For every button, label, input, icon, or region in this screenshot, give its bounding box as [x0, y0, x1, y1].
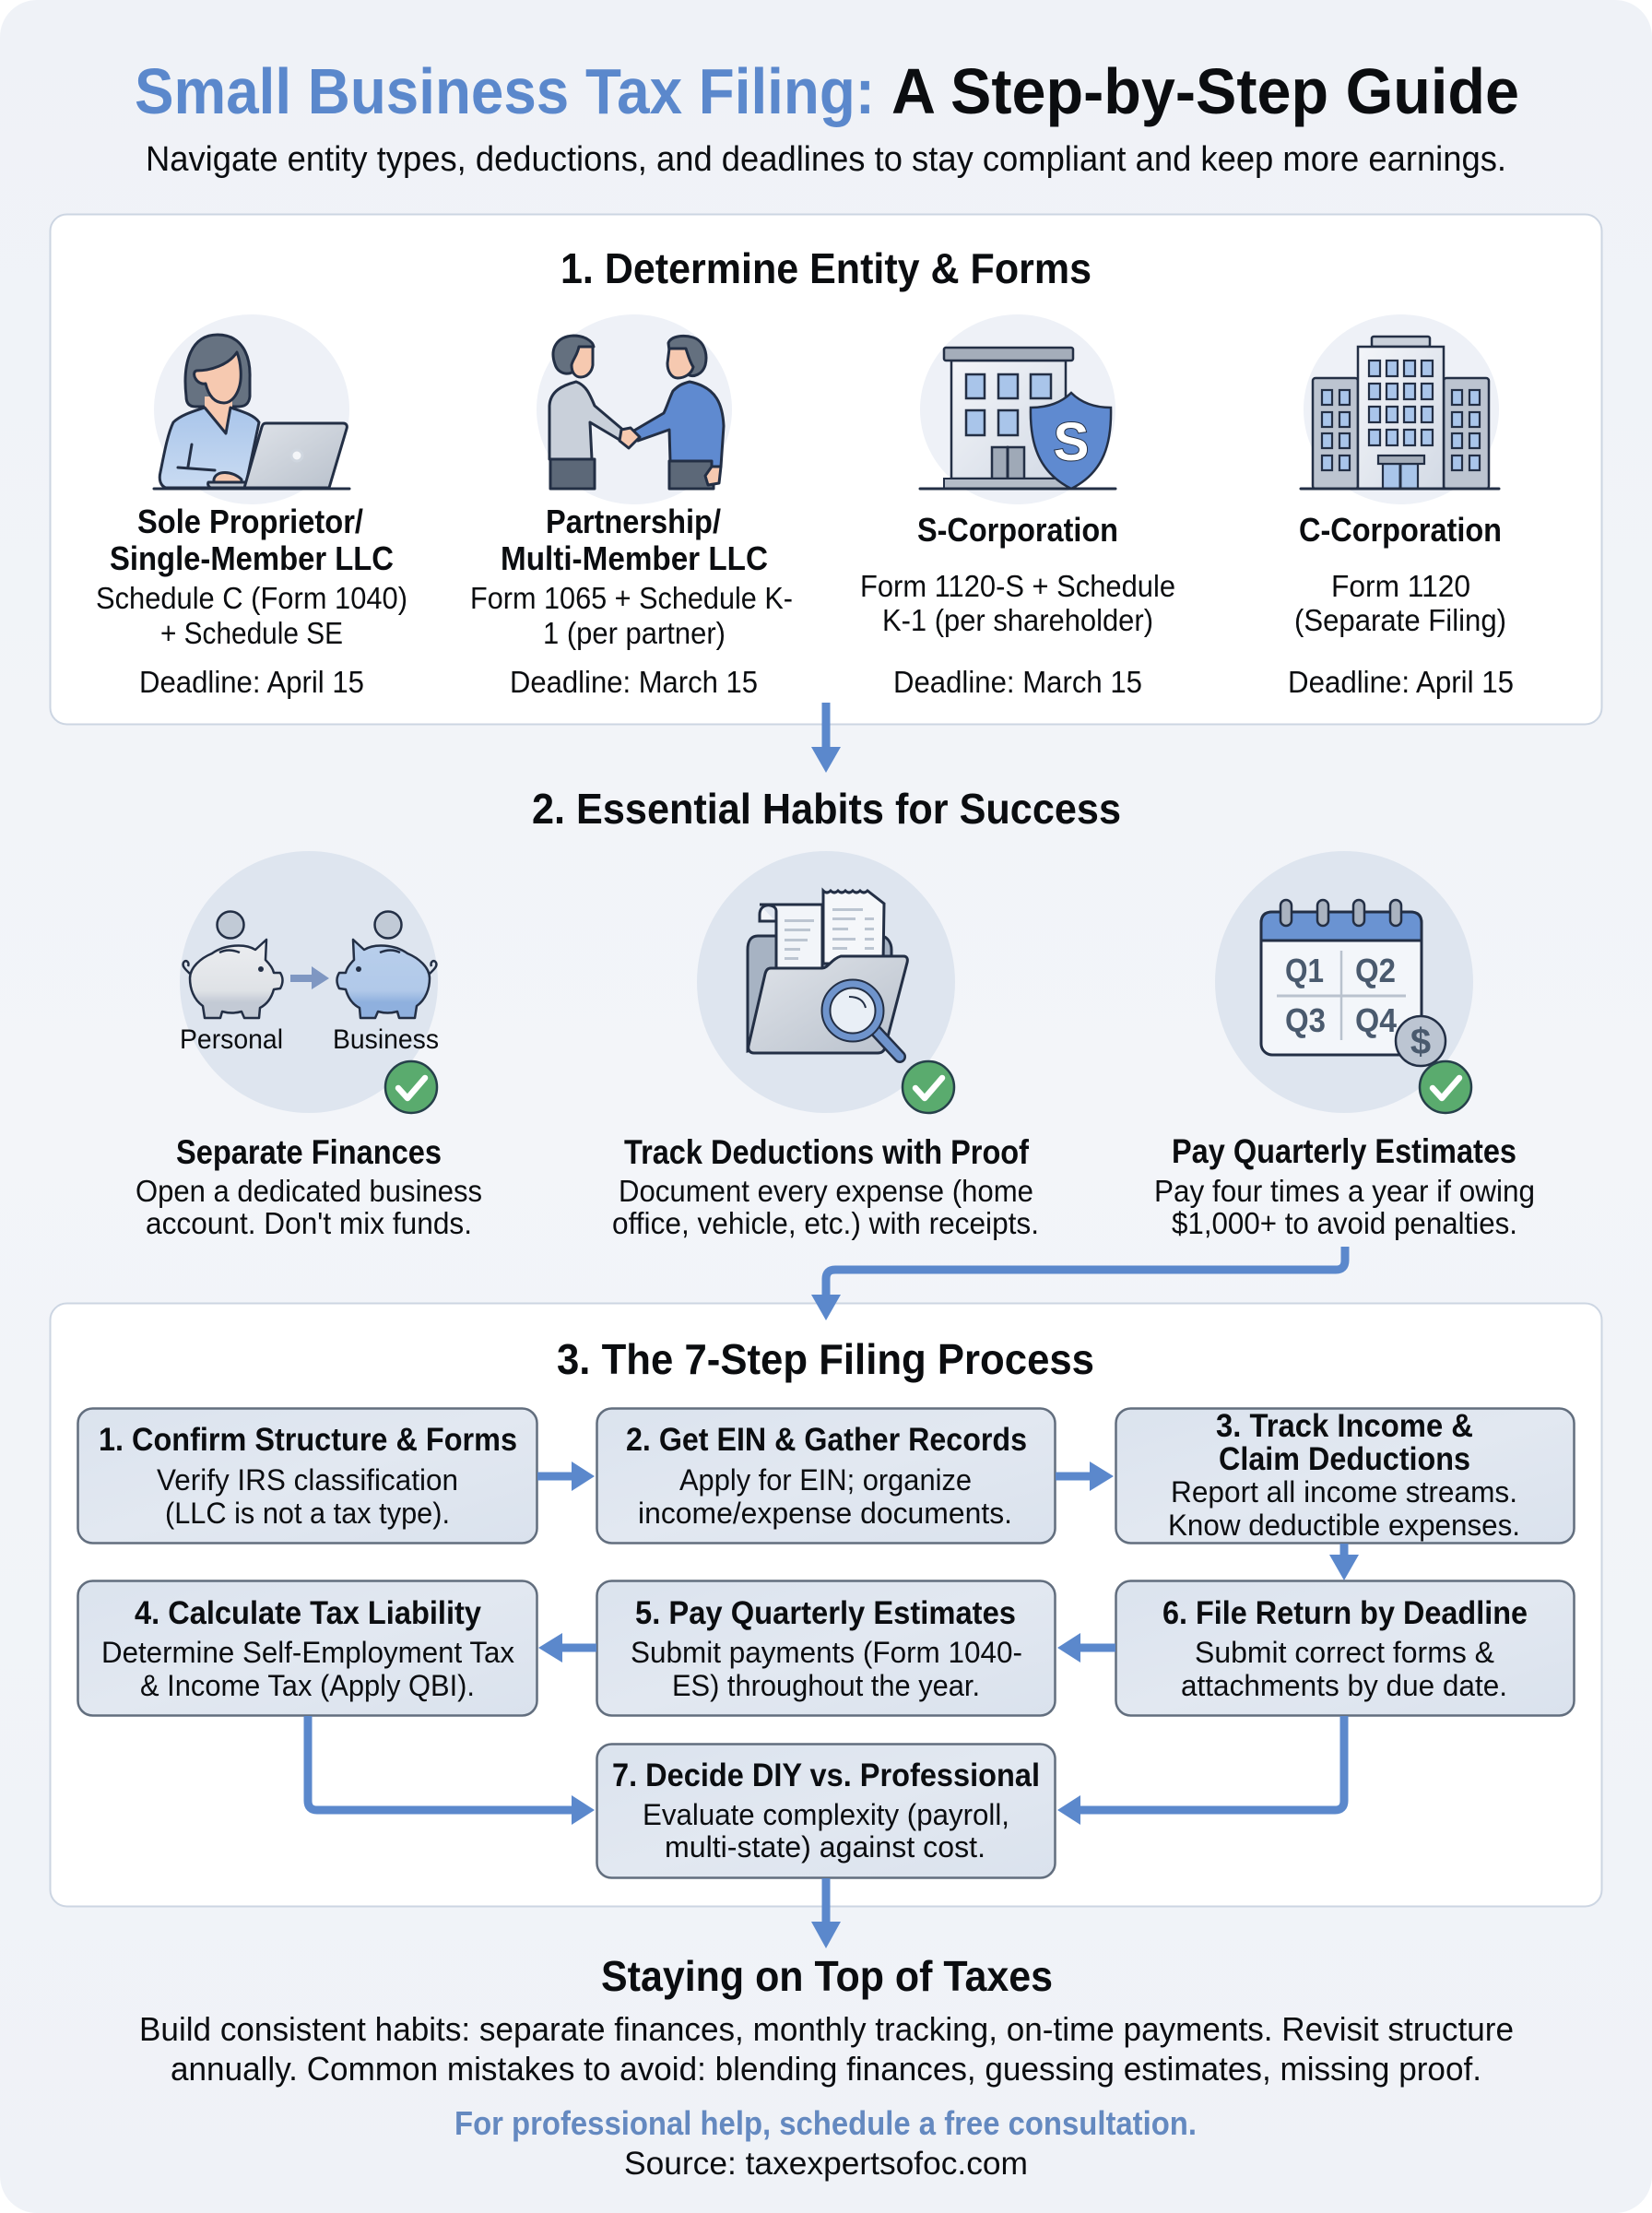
text: summary: Build consistent habits: separate finances, monthly tracking, on-time payments. Revisit structure	[139, 2010, 1514, 2048]
text: partnership: Partnership/	[546, 503, 721, 540]
heading: section 1: 1. Determine Entity & Forms	[560, 244, 1092, 292]
text: c-corporation: (Separate Filing)	[1294, 603, 1506, 637]
arrow: filing process to summary	[811, 1878, 841, 1948]
step 4	[77, 1580, 537, 1715]
text: s-corporation: Form 1120-S + Schedule	[860, 569, 1175, 603]
title: Small Business Tax Filing:	[135, 55, 875, 127]
text: s-corporation	[860, 511, 1175, 699]
text: summary	[139, 2010, 1514, 2088]
step 3: 3. Track Income &	[1216, 1408, 1473, 1444]
text: partnership: Deadline: March 15	[510, 665, 758, 699]
panel: separate finances	[136, 851, 482, 1240]
step 3: Report all income streams.	[1171, 1475, 1517, 1509]
step 1: Verify IRS classification	[157, 1463, 458, 1497]
step 5	[597, 1580, 1055, 1715]
icon: quarterly calendar with coin: $	[1410, 1022, 1431, 1062]
text: s-corporation: Deadline: March 15	[893, 665, 1142, 699]
arrow: step 2 to step 3	[1056, 1462, 1114, 1491]
text: separate finances: Open a dedicated business	[136, 1174, 482, 1208]
heading: staying on top of taxes: Staying on Top of Taxes	[601, 1952, 1053, 2000]
text: sole proprietor	[96, 503, 407, 699]
title	[135, 55, 1519, 127]
step 4: Determine Self-Employment Tax	[101, 1636, 514, 1669]
text: sole proprietor: Deadline: April 15	[139, 665, 364, 699]
text: s-corporation: K-1 (per shareholder)	[882, 603, 1153, 637]
text: pay quarterly estimates	[1154, 1132, 1535, 1240]
text: partnership: Multi-Member LLC	[501, 539, 768, 577]
step 3: Claim Deductions	[1219, 1441, 1470, 1477]
text: pay quarterly estimates: Pay Quarterly Estimates	[1172, 1132, 1516, 1170]
text: c-corporation: C-Corporation	[1299, 511, 1502, 549]
text: separate finances: account. Don't mix funds.	[146, 1206, 472, 1240]
icon: sole proprietor at laptop	[154, 314, 349, 504]
text: partnership	[470, 503, 793, 699]
arrow: step 3 to step 6	[1329, 1544, 1359, 1580]
title: A Step-by-Step Guide	[891, 55, 1519, 127]
icon: quarterly calendar with coin: Q4	[1355, 1001, 1397, 1039]
step 7: Evaluate complexity (payroll,	[643, 1798, 1009, 1831]
text: separate finances: Separate Finances	[176, 1133, 442, 1171]
text: sole proprietor: + Schedule SE	[160, 616, 343, 650]
icon: piggy banks personal to business: Personal	[180, 1024, 283, 1055]
step 2: Apply for EIN; organize	[679, 1463, 972, 1497]
text: c-corporation: Deadline: April 15	[1288, 665, 1514, 699]
source: Source: taxexpertsofoc.com	[624, 2146, 1028, 2182]
text: s-corporation: S-Corporation	[917, 511, 1118, 549]
heading: section 3: 3. The 7-Step Filing Process	[557, 1335, 1094, 1383]
step 1	[77, 1409, 537, 1544]
panel: track deductions	[612, 851, 1039, 1240]
icon: piggy banks personal to business: Business	[333, 1024, 439, 1055]
step 4: 4. Calculate Tax Liability	[135, 1595, 481, 1631]
step 1: 1. Confirm Structure & Forms	[99, 1422, 517, 1458]
panel: 7-step filing process	[50, 1304, 1602, 1907]
step 6: Submit correct forms &	[1195, 1636, 1494, 1669]
step 5: 5. Pay Quarterly Estimates	[635, 1595, 1016, 1631]
panel: pay quarterly estimates	[1154, 851, 1535, 1240]
arrow: step 4 to step 7	[308, 1716, 595, 1825]
heading: section 2: 2. Essential Habits for Success	[532, 785, 1121, 833]
arrow: step 1 to step 2	[537, 1462, 595, 1491]
text: sole proprietor: Schedule C (Form 1040)	[96, 581, 407, 615]
step 6: 6. File Return by Deadline	[1162, 1595, 1528, 1631]
arrow: step 5 to step 4	[538, 1633, 596, 1663]
text: track deductions: Track Deductions with Proof	[624, 1133, 1030, 1171]
step 6	[1115, 1580, 1575, 1715]
step 7: 7. Decide DIY vs. Professional	[612, 1757, 1040, 1793]
icon: s-corporation building with shield: S	[1054, 412, 1089, 472]
step 3	[1115, 1408, 1575, 1544]
text: pay quarterly estimates: Pay four times a year if owing	[1154, 1174, 1535, 1208]
icon: quarterly calendar with coin	[1215, 851, 1473, 1113]
panel: determine entity and forms	[50, 214, 1602, 725]
icon: piggy banks personal to business	[180, 851, 439, 1113]
step 6: attachments by due date.	[1181, 1669, 1507, 1702]
icon: s-corporation building with shield	[920, 314, 1115, 504]
text: summary: annually. Common mistakes to avoid: blending finances, guessing estimates, missing proof.	[171, 2050, 1481, 2088]
step 2: 2. Get EIN & Gather Records	[626, 1422, 1027, 1458]
icon: quarterly calendar with coin: Q2	[1355, 952, 1396, 989]
step 7: multi-state) against cost.	[665, 1830, 985, 1864]
text: track deductions: Document every expense (home	[619, 1174, 1033, 1208]
text: sole proprietor: Sole Proprietor/	[137, 503, 363, 540]
step 1: (LLC is not a tax type).	[165, 1497, 450, 1530]
text: partnership: 1 (per partner)	[543, 616, 726, 650]
text: partnership: Form 1065 + Schedule K-	[470, 581, 793, 615]
text: track deductions	[612, 1133, 1039, 1240]
step 2	[597, 1409, 1055, 1544]
icon: partners shaking hands	[537, 314, 732, 504]
icon: quarterly calendar with coin: Q3	[1285, 1001, 1326, 1039]
step 2: income/expense documents.	[638, 1497, 1012, 1530]
text: c-corporation	[1288, 511, 1514, 699]
text: pay quarterly estimates: $1,000+ to avoid penalties.	[1172, 1206, 1517, 1240]
arrow: step 6 to step 7	[1057, 1716, 1344, 1825]
text: c-corporation: Form 1120	[1331, 569, 1470, 603]
arrow: habits to filing process	[811, 1247, 1345, 1320]
text: separate finances	[136, 1133, 482, 1240]
step 5: ES) throughout the year.	[672, 1669, 980, 1702]
text: sole proprietor: Single-Member LLC	[110, 539, 394, 577]
icon: c-corporation office tower	[1301, 314, 1499, 504]
subtitle: Navigate entity types, deductions, and deadlines to stay compliant and keep more earnings.	[146, 140, 1506, 179]
icon: folder with receipts and magnifier	[697, 851, 955, 1113]
step 5: Submit payments (Form 1040-	[631, 1636, 1022, 1669]
icon: quarterly calendar with coin: Q1	[1285, 952, 1324, 989]
step 3: Know deductible expenses.	[1168, 1509, 1520, 1542]
step 7	[597, 1745, 1055, 1877]
text: track deductions: office, vehicle, etc.) with receipts.	[612, 1206, 1039, 1240]
arrow: section 1 to section 2	[811, 703, 841, 773]
arrow: step 6 to step 5	[1057, 1633, 1115, 1663]
step 4: & Income Tax (Apply QBI).	[140, 1669, 475, 1702]
call to action: For professional help, schedule a free consultation.	[454, 2104, 1197, 2142]
